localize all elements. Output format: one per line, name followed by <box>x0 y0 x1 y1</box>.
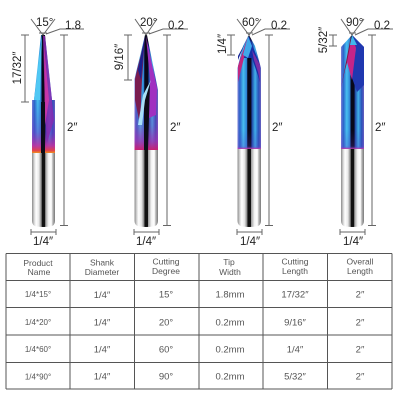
table header: Length <box>347 266 373 276</box>
row: 1/4*15: 1/4″ <box>94 290 111 301</box>
table header: Cutting <box>153 256 180 266</box>
coated flute <box>32 35 55 153</box>
colour band <box>32 100 55 153</box>
label: cutting length: 9/16″ <box>114 44 126 70</box>
label: tip width: 0.2 <box>271 20 287 32</box>
table header: Length <box>282 266 308 276</box>
dimensions: 15 degree bit <box>12 17 84 248</box>
label: shank diameter: 1/4″ <box>136 236 156 248</box>
row: 1/4*90: 2″ <box>356 372 365 382</box>
label: tip width: 0.2 <box>374 20 390 32</box>
row: 1/4*60 <box>25 344 365 356</box>
drill bit: 15 degree <box>32 35 55 227</box>
table header <box>23 256 374 277</box>
coated flute <box>134 35 158 150</box>
shank <box>341 149 364 227</box>
table header: Degree <box>152 266 180 276</box>
shank <box>134 150 158 227</box>
row: 1/4*20: 1/4″ <box>94 318 111 328</box>
dimensions: 60 degree bit <box>217 17 290 248</box>
dimensions: 90 degree bit <box>318 17 393 248</box>
label: overall length: 2″ <box>272 122 282 134</box>
dimensions: 20 degree bit <box>114 17 188 248</box>
shank <box>238 149 261 227</box>
row: 1/4*90: 5/32″ <box>284 372 307 382</box>
flute highlights <box>146 36 157 118</box>
label: overall length: 2″ <box>375 122 385 134</box>
flute highlights <box>43 36 54 143</box>
table header: Name <box>28 267 51 277</box>
table header: Tip <box>223 257 235 267</box>
row: 1/4*90 <box>25 372 365 382</box>
label: 20 degree: 20° <box>140 17 157 29</box>
label: cutting length: 17/32″ <box>12 52 24 84</box>
drill bit: 60 degree <box>238 35 261 227</box>
row: 1/4*90: 0.2mm <box>215 372 245 382</box>
specification table <box>6 254 392 389</box>
table header: Overall <box>347 256 374 266</box>
table header: Width <box>219 267 241 277</box>
row: 1/4*20: 1/4*20° <box>25 318 51 327</box>
colour band <box>134 90 158 150</box>
row: 1/4*20 <box>25 318 365 328</box>
drill bit: 90 degree <box>341 35 364 227</box>
row: 1/4*20: 2″ <box>356 318 365 328</box>
row: 1/4*15: 15° <box>159 290 173 300</box>
label: shank diameter: 1/4″ <box>33 236 53 248</box>
label: shank diameter: 1/4″ <box>240 236 260 248</box>
label: 60 degree: 60° <box>242 17 259 29</box>
table header: Cutting <box>282 256 309 266</box>
label: tip width: 0.2 <box>168 20 184 32</box>
label: overall length: 2″ <box>67 122 77 134</box>
row: 1/4*60: 2″ <box>356 344 365 356</box>
row: 1/4*15: 1/4*15° <box>25 290 51 299</box>
label: cutting length: 1/4″ <box>217 34 229 54</box>
coated flute <box>341 35 364 149</box>
row: 1/4*15: 2″ <box>356 290 365 300</box>
row: 1/4*20: 20° <box>159 318 173 328</box>
row: 1/4*90: 1/4″ <box>94 372 111 382</box>
label: 15 degree: 15° <box>36 17 53 29</box>
row: 1/4*20: 9/16″ <box>284 318 307 328</box>
table header: Diameter <box>85 267 119 277</box>
flute highlights <box>351 35 364 92</box>
row: 1/4*15: 17/32″ <box>281 290 309 300</box>
label: overall length: 2″ <box>170 122 180 134</box>
row: 1/4*90: 1/4*90° <box>25 372 51 382</box>
row: 1/4*60: 0.2mm <box>215 344 245 356</box>
row: 1/4*60: 1/4″ <box>94 344 111 356</box>
label: 90 degree: 90° <box>346 17 363 29</box>
row: 1/4*60: 1/4*60° <box>25 345 51 354</box>
drill bit: 20 degree <box>134 35 158 227</box>
shank <box>32 153 55 227</box>
row: 1/4*60: 1/4″ <box>287 344 304 356</box>
table header: Shank <box>90 258 115 268</box>
colour band <box>238 130 261 149</box>
colour band <box>341 130 364 149</box>
label: shank diameter: 1/4″ <box>343 236 363 248</box>
row: 1/4*15 <box>25 290 365 301</box>
row: 1/4*15: 1.8mm <box>215 290 245 300</box>
table header: Product <box>23 258 53 268</box>
flute highlights <box>243 36 260 82</box>
row: 1/4*20: 0.2mm <box>215 318 245 328</box>
row: 1/4*90: 90° <box>159 372 173 382</box>
row: 1/4*60: 60° <box>159 344 173 356</box>
coated flute <box>238 35 261 149</box>
label: cutting length: 5/32″ <box>318 27 330 53</box>
label: tip width: 1.8 <box>65 20 81 32</box>
